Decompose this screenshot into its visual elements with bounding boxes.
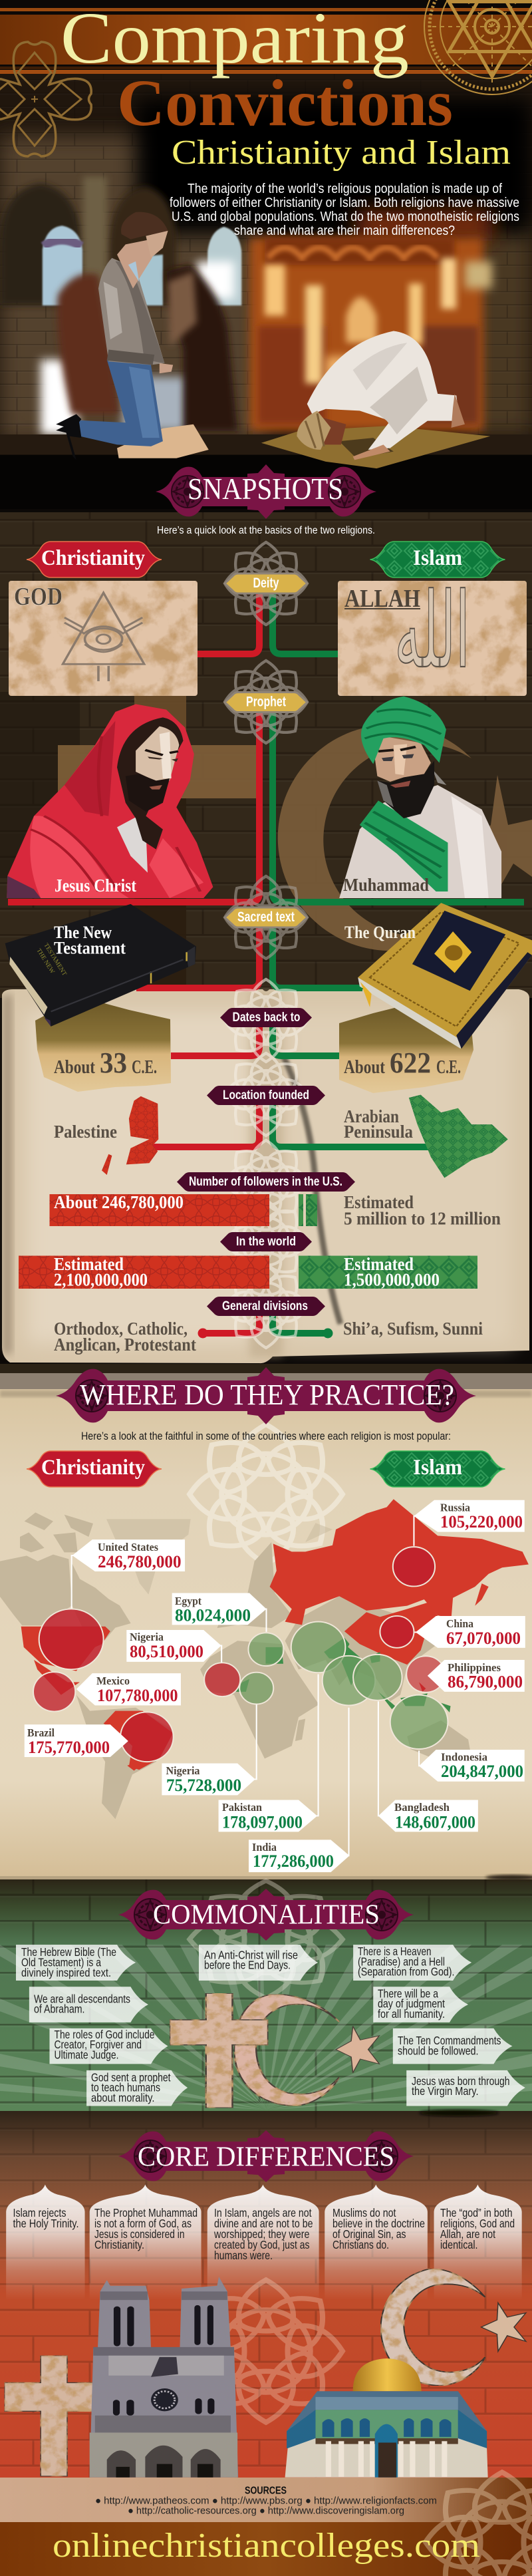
heading: core differences banner: CORE DIFFERENCES bbox=[138, 2142, 394, 2173]
text: Arabian Peninsula: Arabian bbox=[344, 1106, 399, 1126]
badge: Sacred text bbox=[225, 907, 307, 927]
callout: Russia: 105,220,000 bbox=[440, 1512, 523, 1531]
callout: Mexico: 107,780,000 bbox=[97, 1686, 178, 1705]
bar: Christianity world followers: Estimated bbox=[54, 1254, 124, 1274]
stone wall backdrop bbox=[0, 71, 532, 444]
commonality: Ten Commandments bbox=[393, 2028, 512, 2064]
ornament: deity rosette bbox=[225, 542, 307, 625]
label: Christianity: Christianity bbox=[41, 1456, 145, 1480]
badge: Dates back to: Dates back to bbox=[233, 1011, 301, 1025]
callout: Indonesia: 204,847,000 bbox=[441, 1762, 523, 1781]
callout: Brazil bbox=[25, 1724, 128, 1757]
difference: Holy Trinity bbox=[6, 2185, 85, 2300]
text: Arabian Peninsula: Peninsula bbox=[344, 1122, 413, 1142]
callout: India: India bbox=[252, 1841, 277, 1853]
background cross bbox=[58, 696, 256, 998]
difference: god and Allah: Allah, are not bbox=[440, 2227, 495, 2241]
name: Jesus Christ: Jesus Christ bbox=[55, 876, 136, 895]
icon: New Testament book bbox=[5, 904, 196, 1027]
callout: Indonesia bbox=[419, 1750, 525, 1782]
callout: China bbox=[416, 1616, 525, 1648]
commonality: prophet: God sent a prophet bbox=[91, 2070, 171, 2084]
connector end dots bbox=[198, 1328, 332, 1339]
text: Christian divisions: Orthodox, Catholic, bbox=[54, 1319, 188, 1339]
panel: allah stone bbox=[338, 571, 527, 696]
callout: Nigeria (Christianity): 80,510,000 bbox=[130, 1642, 203, 1661]
difference: angels: divine and are not to be bbox=[214, 2217, 313, 2230]
callout: Mexico: Mexico bbox=[96, 1675, 130, 1687]
rays bbox=[0, 1945, 532, 2110]
badge: Location founded: Location founded bbox=[223, 1088, 309, 1102]
callout: Egypt: 80,024,000 bbox=[175, 1606, 251, 1625]
difference: Original Sin bbox=[325, 2185, 428, 2300]
leader lines bbox=[72, 1516, 441, 1855]
commonality: Ten Commandments: The Ten Commandments bbox=[398, 2034, 501, 2047]
callout: Philippines bbox=[428, 1660, 525, 1692]
date: About 33 C.E. bbox=[54, 1046, 157, 1079]
spine lettering: THE NEW bbox=[35, 947, 55, 975]
icon: cross and crescent bbox=[170, 1993, 379, 2108]
commonality: prophet: about morality. bbox=[91, 2091, 154, 2104]
commonality: judgment: for all humanity. bbox=[378, 2007, 445, 2020]
badge: General divisions: General divisions bbox=[222, 1299, 308, 1313]
map: world land bbox=[0, 1512, 471, 1819]
callout: Egypt: Egypt bbox=[175, 1595, 201, 1607]
date: About 33 C.E.: About bbox=[54, 1057, 96, 1078]
heading: where do they practice banner bbox=[56, 1367, 476, 1424]
badge: Number of followers in the U.S.: Number of followers in the U.S. bbox=[189, 1175, 342, 1189]
commonality: prophet: to teach humans bbox=[91, 2081, 160, 2094]
panel: snapshots background bbox=[0, 512, 532, 998]
map intro text: Here’s a look at the faithful in some of the countries where each religion is most popular: bbox=[81, 1430, 451, 1442]
difference: god and Allah: The “god” in both bbox=[440, 2206, 512, 2219]
ornament: medallion bbox=[424, 0, 532, 94]
badge: Deity: Deity bbox=[253, 575, 279, 591]
bar: Islam world followers: 1,500,000,000 bbox=[344, 1269, 440, 1289]
callout: Pakistan bbox=[219, 1800, 317, 1832]
church interior bbox=[0, 176, 241, 434]
commonality: Ten Commandments: should be followed. bbox=[398, 2044, 479, 2057]
difference: Prophet Muhammad: The Prophet Muhammad bbox=[94, 2206, 198, 2219]
commonality: Abraham: We are all descendants bbox=[34, 1992, 130, 2005]
land: North America bbox=[0, 1512, 191, 1641]
callout: United States: United States bbox=[98, 1541, 158, 1553]
background crescent and star bbox=[278, 724, 532, 951]
illustration: Dome of the Rock bbox=[285, 2358, 488, 2478]
map: Christian-majority countries bbox=[21, 1499, 529, 1771]
callout: Nigeria (Islam): Nigeria bbox=[166, 1764, 200, 1777]
commonality: prophet bbox=[86, 2070, 188, 2106]
callout: Brazil: Brazil bbox=[27, 1726, 55, 1739]
commonality: Hebrew Bible: Old Testament) is a bbox=[21, 1956, 101, 1969]
badge: Deity bbox=[225, 573, 307, 593]
callout: Philippines: 86,790,000 bbox=[448, 1673, 523, 1691]
text: Islamic divisions: Shi’a, Sufism, Sunni bbox=[343, 1319, 483, 1339]
label: Islam: Islam bbox=[413, 546, 462, 570]
timeline connectors: book section bbox=[136, 927, 432, 1333]
callout: Bangladesh: Bangladesh bbox=[394, 1801, 450, 1814]
callout: Indonesia: Indonesia bbox=[441, 1751, 487, 1763]
bar: Christianity U.S. followers: About 246,780,000 bbox=[54, 1192, 184, 1212]
commonality: Virgin Mary: the Virgin Mary. bbox=[412, 2084, 479, 2098]
spine lettering: TESTAMENT bbox=[42, 942, 68, 977]
panel: god stone bbox=[9, 581, 198, 696]
figure: Muhammad portrait bbox=[339, 697, 501, 898]
panel: where do they practice background bbox=[0, 1364, 532, 1879]
intro text bbox=[170, 182, 519, 238]
footer URL: onlinechristiancolleges.com bbox=[53, 2527, 480, 2565]
difference: Prophet Muhammad: Christianity. bbox=[94, 2238, 144, 2251]
commonality: Heaven and Hell: (Separation from God). bbox=[358, 1965, 455, 1979]
text: Christian divisions bbox=[54, 1319, 196, 1355]
badge: General divisions bbox=[207, 1297, 325, 1316]
difference: god and Allah bbox=[434, 2185, 522, 2300]
difference: Prophet Muhammad: Jesus is considered in bbox=[94, 2227, 185, 2241]
sources list bbox=[95, 2495, 437, 2516]
label: The New Testament bbox=[54, 923, 126, 958]
ornament: footer rosette bbox=[426, 2472, 532, 2576]
difference: angels: In Islam, angels are not bbox=[214, 2206, 312, 2219]
intro text: share and what are their main differences? bbox=[234, 224, 455, 238]
bar: Islam world followers bbox=[299, 1254, 477, 1289]
commonality: Hebrew Bible: divinely inspired text. bbox=[21, 1966, 111, 1979]
callout: United States bbox=[72, 1539, 185, 1571]
callout: Russia bbox=[414, 1500, 525, 1532]
callout: Bangladesh bbox=[378, 1800, 478, 1832]
difference: god and Allah: religions, God and bbox=[440, 2217, 515, 2230]
heading: snapshots banner bbox=[156, 464, 376, 519]
label: The Quran: The Quran bbox=[344, 923, 416, 942]
badge: Dates back to bbox=[220, 1008, 312, 1027]
callout: Brazil: 175,770,000 bbox=[28, 1738, 110, 1757]
label: Christianity bbox=[27, 1451, 162, 1487]
callout: Egypt bbox=[172, 1593, 267, 1625]
callout: Nigeria (Islam): 75,728,000 bbox=[166, 1776, 241, 1795]
heading: snapshots banner: SNAPSHOTS bbox=[188, 472, 343, 506]
bar: Christianity U.S. followers bbox=[49, 1192, 269, 1226]
badge: In the world bbox=[220, 1232, 312, 1251]
illustration: Notre Dame cathedral bbox=[90, 2277, 238, 2478]
callout: Pakistan: Pakistan bbox=[222, 1801, 263, 1814]
date: About 622 C.E.: 622 bbox=[390, 1046, 431, 1079]
label: Islam bbox=[370, 1451, 505, 1487]
mosque interior bbox=[249, 238, 492, 431]
callout: China: 67,070,000 bbox=[446, 1629, 521, 1648]
text: GOD: GOD bbox=[14, 583, 63, 611]
chart: population circles bbox=[33, 1547, 448, 1762]
callout: China: China bbox=[446, 1617, 473, 1630]
callout: India: 177,286,000 bbox=[253, 1852, 334, 1871]
panel: commonalities background bbox=[0, 1875, 532, 2112]
commonality: Abraham: of Abraham. bbox=[34, 2003, 85, 2016]
difference: Original Sin: believe in the doctrine bbox=[332, 2217, 425, 2230]
date: About 33 C.E.: 33 bbox=[100, 1046, 127, 1079]
ornaments: pale rosettes on book bbox=[225, 979, 307, 1348]
ledge bbox=[0, 434, 532, 509]
top band bbox=[0, 8, 532, 74]
label: The New Testament: The New bbox=[54, 923, 112, 942]
timeline connectors: deity and prophet bbox=[8, 593, 524, 902]
ornament: large rosette bbox=[190, 1424, 342, 1564]
bar: Islam U.S. followers: 5 million to 12 million bbox=[344, 1208, 501, 1228]
commonality: judgment: day of judgment bbox=[378, 1997, 445, 2011]
callout: Philippines: Philippines bbox=[448, 1661, 501, 1674]
callout: United States: 246,780,000 bbox=[98, 1552, 181, 1571]
label: Islam bbox=[370, 542, 505, 577]
heading: commonalities banner: COMMONALITIES bbox=[153, 1900, 380, 1931]
ornament: sacred text rosette bbox=[225, 876, 307, 959]
panel: open book bbox=[2, 989, 529, 1363]
date: About 622 C.E.: C.E. bbox=[436, 1057, 461, 1078]
bar: Christianity world followers bbox=[19, 1254, 269, 1289]
commonality: Abraham bbox=[29, 1987, 148, 2022]
callout: Mexico bbox=[76, 1673, 181, 1705]
bar: Islam U.S. followers bbox=[299, 1192, 501, 1228]
difference: Holy Trinity: Islam rejects bbox=[13, 2206, 66, 2219]
bar: Islam world followers: Estimated bbox=[344, 1254, 414, 1274]
icon: stone cross bbox=[5, 2356, 94, 2476]
label: Christianity bbox=[27, 542, 162, 577]
ornament: core differences rosette bbox=[190, 2280, 342, 2422]
panel: core differences background bbox=[0, 2110, 532, 2478]
commonality: Virgin Mary: Jesus was born through bbox=[412, 2074, 509, 2088]
bar: Islam U.S. followers: Estimated bbox=[344, 1192, 414, 1212]
heading: sources: SOURCES bbox=[245, 2486, 287, 2496]
callout: Nigeria (Islam) bbox=[162, 1764, 255, 1795]
text: ALLAH: ALLAH bbox=[344, 585, 420, 613]
date: About 622 C.E. bbox=[344, 1046, 461, 1079]
panel: sources bbox=[0, 2478, 532, 2523]
heading: commonalities banner bbox=[118, 1889, 414, 1941]
difference: god and Allah: identical. bbox=[440, 2238, 477, 2251]
map: Palestine bbox=[102, 1096, 158, 1175]
map: Muslim-majority countries bbox=[236, 1638, 451, 1712]
commonality: judgment: There will be a bbox=[378, 1987, 438, 2000]
commonality: Hebrew Bible bbox=[16, 1945, 136, 1981]
commonality: Virgin Mary bbox=[406, 2070, 525, 2106]
commonality: judgment bbox=[373, 1987, 468, 2022]
label: Islam: Islam bbox=[413, 1456, 462, 1480]
badge: Number of followers in the U.S. bbox=[177, 1172, 355, 1192]
callout: Nigeria (Christianity): Nigeria bbox=[130, 1631, 164, 1643]
panel: hero scene bbox=[0, 71, 532, 509]
stone: left date bbox=[35, 1003, 171, 1092]
callout: India bbox=[249, 1840, 350, 1872]
stone: right date bbox=[339, 1007, 473, 1093]
bar: Christianity world followers: 2,100,000,000 bbox=[54, 1269, 148, 1289]
sources list: ● http://www.patheos.com ● http://www.pbs.org ● http://www.religionfacts.com bbox=[95, 2495, 437, 2507]
badge: Sacred text: Sacred text bbox=[237, 909, 295, 925]
commonality: roles of God bbox=[49, 2028, 168, 2064]
difference: angels: created by God, just as bbox=[214, 2238, 310, 2251]
text: Arabian Peninsula bbox=[344, 1106, 413, 1142]
difference: Prophet Muhammad: is not a form of God, as bbox=[94, 2217, 192, 2230]
heading: Christianity and Islam: Christianity and Islam bbox=[172, 134, 511, 172]
heading: where do they practice banner: WHERE DO THEY PRACTICE? bbox=[80, 1378, 454, 1411]
map: Arabian Peninsula bbox=[409, 1095, 508, 1178]
commonality: Hebrew Bible: The Hebrew Bible (The bbox=[21, 1945, 116, 1959]
sources list: ● http://catholic-resources.org ● http://www.discoveringislam.org bbox=[128, 2505, 404, 2516]
commonality: Anti-Christ: An Anti-Christ will rise bbox=[204, 1948, 298, 1961]
difference: angels: worshipped; they were bbox=[213, 2227, 310, 2241]
panel: footer bbox=[0, 2472, 532, 2576]
difference: Original Sin: Christians do. bbox=[332, 2238, 389, 2251]
difference: angels: humans were. bbox=[214, 2249, 273, 2262]
difference: Original Sin: of Original Sin, as bbox=[332, 2227, 406, 2241]
land: rest of world bbox=[76, 1523, 471, 1819]
label: Christianity: Christianity bbox=[41, 546, 145, 570]
commonality: Heaven and Hell bbox=[353, 1945, 471, 1981]
badge: Prophet: Prophet bbox=[246, 695, 286, 709]
ornament: commonalities rosette bbox=[190, 1881, 342, 1998]
commonality: roles of God: The roles of God include bbox=[55, 2028, 154, 2041]
icon: allah calligraphy: الله bbox=[394, 571, 470, 692]
snapshots subtitle: Here’s a quick look at the basics of the two religions. bbox=[157, 525, 375, 536]
commonality: Heaven and Hell: (Paradise) and a Hell bbox=[358, 1955, 445, 1968]
text: Palestine: Palestine bbox=[54, 1122, 117, 1142]
date: About 33 C.E.: C.E. bbox=[132, 1057, 157, 1078]
name: Muhammad: Muhammad bbox=[343, 875, 429, 895]
icon: Quran book bbox=[358, 903, 532, 1048]
commonality: roles of God: Ultimate Judge. bbox=[55, 2048, 118, 2061]
label: The New Testament: Testament bbox=[54, 938, 126, 958]
badge: Prophet bbox=[225, 692, 307, 712]
callout: Russia: Russia bbox=[440, 1501, 470, 1514]
badge: In the world: In the world bbox=[236, 1235, 296, 1249]
difference: Holy Trinity: the Holy Trinity. bbox=[13, 2217, 78, 2230]
figure: Jesus Christ portrait bbox=[7, 704, 213, 898]
commonality: Anti-Christ: before the End Days. bbox=[204, 1959, 291, 1972]
commonality: Anti-Christ bbox=[199, 1945, 318, 1981]
callout: Bangladesh: 148,607,000 bbox=[395, 1812, 475, 1832]
date: About 622 C.E.: About bbox=[344, 1057, 386, 1078]
heading: core differences banner bbox=[118, 2130, 414, 2182]
panel: title header bbox=[0, 0, 532, 238]
icon: stone crescent and star bbox=[380, 2269, 526, 2386]
ornament: cross knot bbox=[0, 42, 91, 156]
callout: Pakistan: 178,097,000 bbox=[222, 1812, 303, 1832]
ornament: prophet rosette bbox=[225, 661, 307, 743]
callout: Nigeria (Christianity) bbox=[126, 1630, 221, 1662]
icon: all-seeing eye bbox=[63, 593, 144, 681]
figure: praying man bbox=[261, 331, 490, 468]
badge: Location founded bbox=[207, 1086, 325, 1105]
commonality: Heaven and Hell: There is a Heaven bbox=[358, 1945, 431, 1958]
difference: angels bbox=[207, 2185, 319, 2300]
text: Christian divisions: Anglican, Protestant bbox=[54, 1335, 196, 1355]
difference: Original Sin: Muslims do not bbox=[332, 2206, 396, 2219]
figure: kneeling woman bbox=[56, 212, 209, 460]
difference: Prophet Muhammad bbox=[90, 2185, 201, 2300]
heading: Convictions: Convictions bbox=[117, 66, 453, 140]
commonality: roles of God: Creator, Forgiver and bbox=[55, 2038, 142, 2051]
